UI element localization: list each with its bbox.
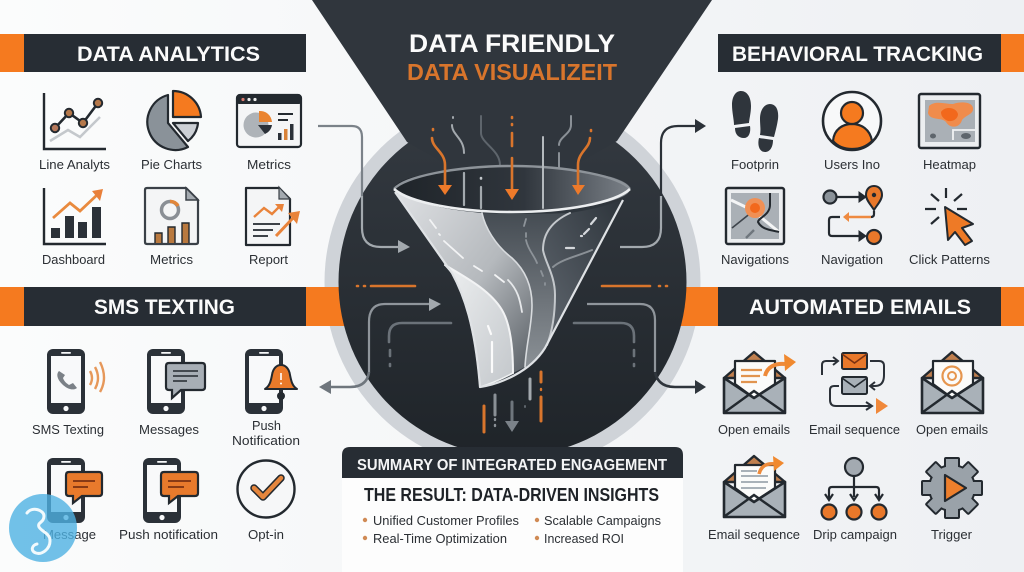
arrows entering funnel (inside) (432, 117, 591, 208)
label: navigations: Navigations (721, 252, 789, 267)
label: push notification: Push notification (119, 527, 218, 542)
arrows entering funnel (back) (452, 116, 571, 192)
heading: automated emails (680, 287, 1024, 326)
funnel right ribbon (543, 200, 623, 345)
icon: open email send (724, 352, 796, 413)
summary bullets: Increased ROI (544, 531, 624, 546)
funnel body (395, 192, 623, 387)
icon: messages (147, 349, 205, 414)
panel: data analytics (0, 34, 306, 267)
funnel center ribbon (482, 213, 570, 367)
icon: email sequence loop (822, 353, 888, 414)
label: trigger: Trigger (931, 527, 973, 542)
arrow: funnel to automated emails (587, 304, 706, 394)
label: click patterns: Click Patterns (909, 252, 990, 267)
label: sms texting: SMS Texting (32, 422, 104, 437)
data streams leaving funnel (484, 372, 541, 432)
funnel outline (395, 192, 623, 387)
summary bullets (363, 513, 661, 546)
icon: dashboard (44, 188, 106, 244)
label: email sequence: Email sequence (708, 527, 800, 542)
label: email sequence: Email sequence (809, 422, 900, 437)
funnel lower-left ribbon (445, 265, 513, 387)
title (407, 30, 617, 85)
label: heatmap: Heatmap (923, 157, 976, 172)
label: opt-in: Opt-in (248, 527, 284, 542)
heading: sms texting: SMS TEXTING (94, 296, 235, 319)
label: dashboard: Dashboard (42, 252, 105, 267)
icon: click patterns (925, 188, 973, 245)
label: users info: Users Ino (824, 157, 880, 172)
panel: sms texting (0, 287, 346, 542)
icon: user (823, 92, 881, 150)
icon: line analytics (44, 93, 106, 149)
funnel (394, 166, 630, 387)
label: report: Report (249, 252, 288, 267)
funnel rim (394, 166, 630, 189)
arrow: funnel to behavioral tracking (620, 119, 706, 247)
label: open emails: Open emails (916, 422, 988, 437)
summary bullets: Unified Customer Profiles (373, 513, 519, 528)
icon: opt-in check (238, 460, 294, 518)
icon: footprints (732, 91, 778, 152)
summary heading bar (342, 447, 683, 478)
label: push notification (232, 418, 300, 448)
decorative connector lines (357, 286, 667, 366)
label: open emails: Open emails (718, 422, 790, 437)
heading: sms texting (0, 287, 346, 326)
label: drip campaign: Drip campaign (813, 527, 897, 542)
icon: report metrics (145, 188, 198, 244)
heading: data analytics: DATA ANALYTICS (77, 43, 260, 66)
icon: drip campaign (822, 458, 886, 520)
panel: summary of integrated engagement (342, 447, 683, 572)
label: navigation: Navigation (821, 252, 883, 267)
arrow: analytics to funnel (318, 126, 410, 253)
arrow: funnel to sms texting (319, 298, 441, 394)
icon: sms phone (47, 349, 104, 414)
label: footprints: Footprin (731, 157, 779, 172)
icon: push notification bell (245, 349, 297, 414)
icon: open email at sign (922, 352, 983, 413)
label: messages: Messages (139, 422, 200, 437)
label: metrics: Metrics (247, 157, 292, 172)
summary bullets: Real-Time Optimization (373, 531, 507, 546)
label: message: Message (43, 527, 96, 542)
icon: email sequence letter (724, 456, 785, 517)
heading: data analytics (0, 34, 306, 72)
funnel upper-left ribbon (395, 192, 532, 373)
icon: pie chart (147, 91, 201, 150)
title: DATA FRIENDLY (409, 30, 615, 58)
summary result heading: THE RESULT: DATA-DRIVEN INSIGHTS (364, 484, 659, 505)
icon: trigger gear (921, 457, 983, 519)
label: metrics: Metrics (150, 252, 194, 267)
label: line analytics: Line Analyts (39, 157, 111, 172)
heading: behavioral tracking (718, 34, 1024, 72)
heading: automated emails: AUTOMATED EMAILS (749, 296, 971, 319)
summary bullets: Scalable Campaigns (544, 513, 661, 528)
label: push notification: Push (252, 418, 281, 433)
icon: report (246, 187, 300, 245)
funnel rim front (394, 189, 630, 212)
panel: behavioral tracking (718, 34, 1024, 267)
central disc ring (324, 94, 700, 470)
icon: navigations map (726, 188, 784, 244)
summary card (342, 447, 683, 572)
panel: automated emails (680, 287, 1024, 542)
funnel highlight strokes (430, 213, 596, 373)
heading: behavioral tracking: BEHAVIORAL TRACKING (732, 43, 983, 66)
icon: heatmap (919, 94, 980, 148)
icon: message phone (47, 458, 102, 523)
title: DATA VISUALIZEIT (407, 59, 617, 85)
watermark logo (9, 494, 77, 562)
label: pie charts: Pie Charts (141, 157, 202, 172)
icon: push notification phone (143, 458, 198, 523)
icon: metrics window (237, 95, 301, 147)
central dark disc and banner (312, 0, 712, 456)
label: push notification: Notification (232, 433, 300, 448)
summary heading bar: SUMMARY OF INTEGRATED ENGAGEMENT (357, 457, 668, 474)
icon: navigation route (824, 186, 882, 244)
